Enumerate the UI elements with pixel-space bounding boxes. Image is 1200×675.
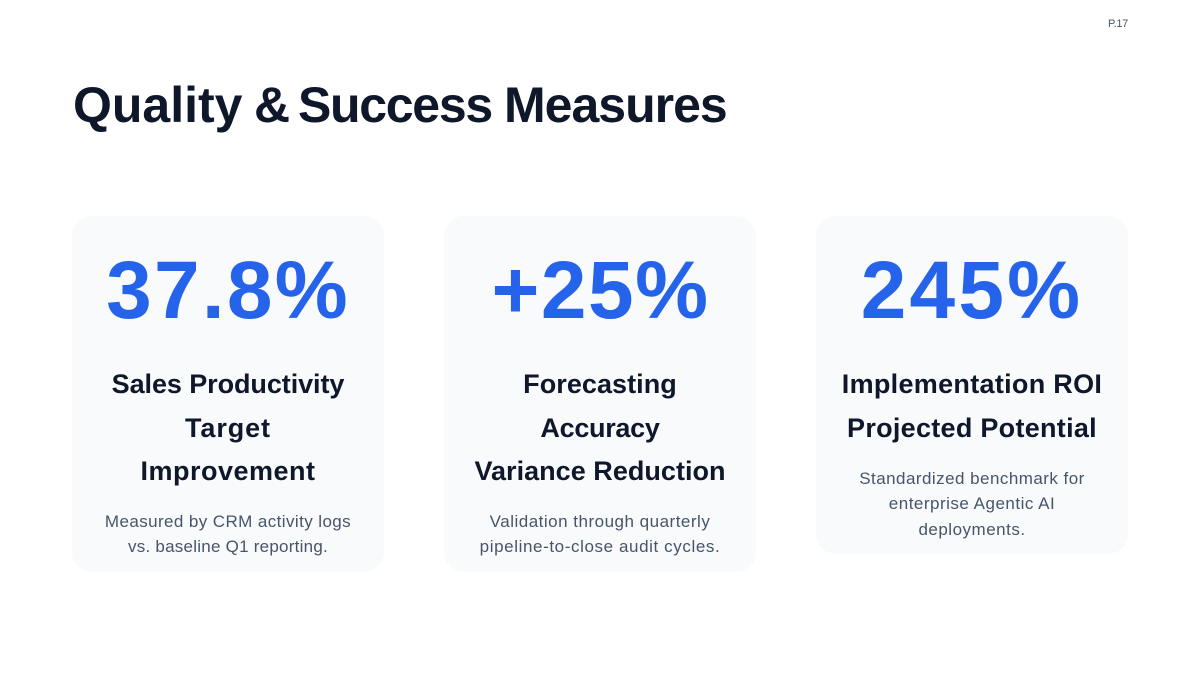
- description: implementation ROI: [859, 468, 1085, 538]
- heading: implementation ROI: Projected Potential: [847, 412, 1097, 442]
- panel: forecasting accuracy: [444, 216, 756, 572]
- heading: sales productivity: [112, 369, 344, 486]
- metric: +25%: +25%: [491, 245, 710, 336]
- description: implementation ROI: deployments.: [918, 520, 1026, 538]
- description: forecasting accuracy: [480, 512, 720, 556]
- heading: forecasting accuracy: [474, 369, 726, 486]
- title: &: [254, 77, 289, 133]
- metric: 245%: 245%: [861, 245, 1083, 336]
- description: sales productivity: [105, 512, 351, 556]
- title: Quality: [73, 77, 242, 133]
- description: implementation ROI: enterprise Agentic AI: [889, 494, 1055, 513]
- description: forecasting accuracy: pipeline-to-close audit cycles.: [480, 537, 720, 556]
- heading: implementation ROI: Implementation ROI: [842, 369, 1102, 399]
- heading: sales productivity: Sales Productivity: [112, 369, 344, 399]
- heading: forecasting accuracy: Variance Reduction: [474, 456, 726, 486]
- metric: 37.8%: 37.8%: [106, 245, 350, 336]
- panel: sales productivity: [72, 216, 384, 572]
- heading: forecasting accuracy: Accuracy: [540, 412, 660, 442]
- title: [73, 77, 727, 133]
- panel: implementation ROI: [816, 216, 1128, 554]
- heading: implementation ROI: [842, 369, 1102, 442]
- description: sales productivity: Measured by CRM activity logs: [105, 512, 351, 530]
- title: Success: [298, 77, 492, 133]
- heading: sales productivity: Improvement: [140, 456, 316, 486]
- heading: forecasting accuracy: Forecasting: [523, 369, 677, 399]
- description: sales productivity: vs. baseline Q1 reporting.: [128, 537, 328, 556]
- title: Measures: [504, 77, 727, 133]
- description: forecasting accuracy: Validation through quarterly: [490, 512, 710, 530]
- heading: sales productivity: Target: [185, 412, 271, 442]
- page number: P.17: [1108, 18, 1128, 30]
- description: implementation ROI: Standardized benchmark for: [859, 468, 1085, 488]
